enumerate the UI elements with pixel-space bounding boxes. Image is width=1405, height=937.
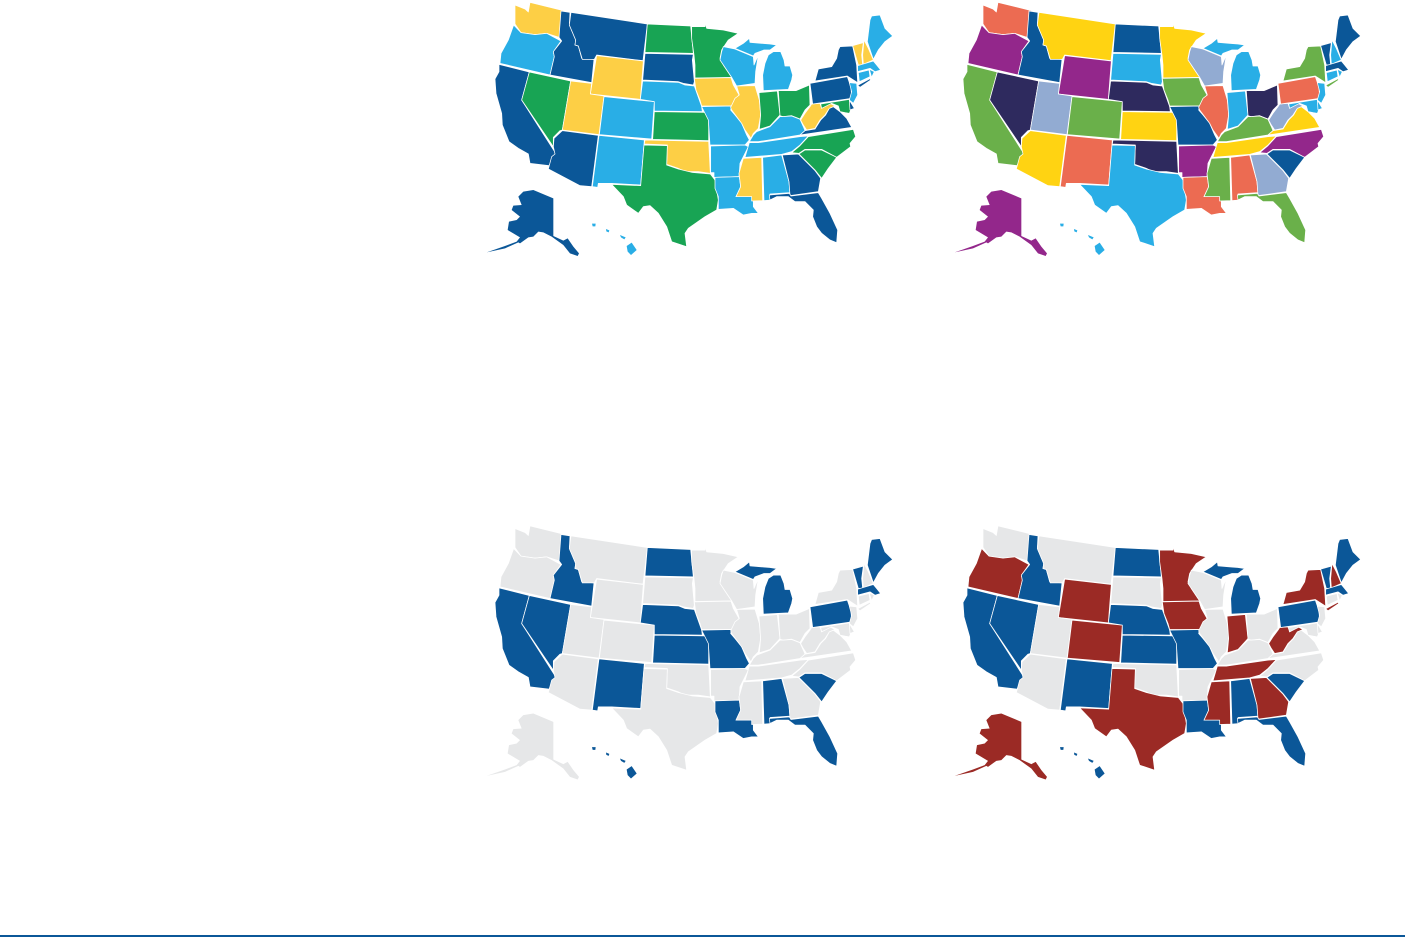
state UT (1030, 81, 1072, 135)
state LA (715, 700, 758, 738)
state ME (867, 538, 893, 583)
state MA (858, 584, 881, 595)
state KY (1217, 639, 1273, 665)
state ND (645, 24, 693, 53)
state KS (1121, 112, 1177, 141)
state CA (963, 588, 1024, 689)
state MA (858, 61, 881, 72)
state GA (1250, 677, 1289, 719)
state MS (736, 681, 763, 724)
state PA (810, 600, 852, 627)
state NE (640, 604, 702, 635)
state IL (731, 86, 761, 138)
state TN (745, 136, 808, 157)
state NH (1331, 563, 1341, 588)
state UT (1030, 604, 1072, 658)
state ID (1018, 11, 1062, 83)
state TX (1080, 145, 1186, 247)
state NJ (1317, 606, 1326, 627)
state NV (990, 595, 1039, 670)
state OK (1112, 140, 1178, 173)
state ID (550, 534, 594, 606)
state SC (1267, 673, 1305, 702)
state IL (1199, 86, 1229, 138)
state GA (782, 154, 821, 196)
state WY (1058, 56, 1111, 99)
state MT (1037, 536, 1115, 584)
bottom rule (0, 935, 1405, 937)
state MD (1289, 623, 1319, 637)
state VA (1268, 107, 1320, 135)
state RI (869, 69, 874, 77)
state TN (745, 659, 808, 681)
state MD (1289, 99, 1319, 113)
state MN (692, 23, 738, 78)
state LA (1183, 700, 1226, 738)
state VA (800, 107, 852, 135)
state AR (1179, 145, 1216, 177)
state MI (735, 562, 793, 614)
state WY (1058, 579, 1111, 623)
state MS (1204, 681, 1231, 724)
state WA (983, 2, 1033, 37)
state OH (778, 85, 810, 119)
state MT (569, 12, 647, 61)
state AR (711, 145, 748, 177)
state CA (495, 64, 556, 166)
state MT (1037, 12, 1115, 61)
state AZ (548, 131, 598, 187)
state OR (968, 25, 1029, 75)
state NM (592, 135, 644, 187)
state AZ (548, 654, 598, 710)
state UT (562, 81, 604, 135)
state OR (500, 548, 561, 598)
state KS (1121, 635, 1177, 664)
state IN (759, 91, 780, 129)
state NH (863, 40, 873, 64)
state WI (720, 47, 758, 86)
state KY (1217, 116, 1273, 142)
state AK (955, 190, 1047, 256)
state IL (731, 609, 761, 662)
state MO (1170, 106, 1217, 145)
state TN (1213, 136, 1276, 157)
state NE (1108, 604, 1170, 635)
state FL (1237, 716, 1306, 766)
state NY (1283, 46, 1339, 87)
state OH (1246, 85, 1278, 119)
state MN (1160, 23, 1206, 78)
state NM (1060, 659, 1112, 711)
state AK (955, 713, 1047, 779)
state ME (1335, 15, 1361, 59)
state TN (1213, 659, 1276, 681)
state OK (644, 140, 710, 173)
state WI (1188, 570, 1226, 609)
state NH (863, 563, 873, 588)
state IA (694, 78, 739, 106)
state SC (799, 673, 837, 702)
state VT (1321, 566, 1331, 588)
map: bottom left, blue and gray states (487, 526, 893, 779)
state NY (815, 46, 871, 87)
state MN (1160, 546, 1206, 601)
state OK (1112, 663, 1178, 697)
state NM (1060, 135, 1112, 187)
state SD (1111, 577, 1162, 608)
state KY (749, 639, 805, 665)
state NV (990, 72, 1039, 147)
state HI (1060, 224, 1105, 255)
state OK (644, 663, 710, 697)
state SC (1267, 150, 1305, 178)
state RI (1337, 69, 1342, 77)
state NC (1260, 129, 1324, 157)
state ND (1113, 547, 1161, 577)
state MD (821, 99, 851, 113)
state AL (763, 155, 790, 201)
state NV (522, 595, 571, 670)
state NJ (849, 606, 858, 627)
map: top right, multicolor states (955, 2, 1361, 256)
state KS (653, 635, 709, 664)
state AZ (1016, 131, 1066, 187)
state WA (515, 526, 565, 561)
state HI (592, 224, 637, 255)
state FL (1237, 193, 1306, 243)
state MO (702, 629, 749, 668)
state AL (1231, 155, 1258, 201)
state DE (1317, 100, 1322, 110)
state LA (1183, 177, 1226, 215)
state NJ (849, 83, 858, 103)
state VA (800, 630, 852, 658)
state MI (1203, 38, 1261, 91)
state ID (550, 11, 594, 83)
state SD (643, 53, 694, 85)
state AK (487, 713, 579, 779)
state MS (736, 157, 763, 201)
state FL (769, 716, 838, 766)
state VT (853, 43, 863, 65)
state MI (735, 38, 793, 91)
state MD (821, 623, 851, 637)
state ME (1335, 538, 1361, 583)
state SD (643, 577, 694, 608)
state MO (702, 106, 749, 145)
state NY (1283, 569, 1339, 611)
state WV (1269, 103, 1303, 130)
state CA (495, 588, 556, 689)
state PA (810, 77, 852, 104)
state AK (487, 190, 579, 256)
state OH (778, 608, 810, 642)
state MN (692, 546, 738, 601)
state KY (749, 116, 805, 142)
state IN (759, 614, 780, 653)
state CO (599, 97, 654, 139)
state TX (612, 668, 718, 770)
state NC (792, 653, 856, 681)
state PA (1278, 77, 1320, 104)
state MA (1326, 584, 1349, 595)
state MI (1203, 562, 1261, 614)
state CO (599, 620, 654, 662)
state CT (858, 70, 870, 82)
state CT (1326, 70, 1338, 82)
state CO (1067, 97, 1122, 139)
state HI (1060, 747, 1105, 778)
state NE (1108, 81, 1170, 112)
state DE (849, 100, 854, 110)
state NJ (1317, 83, 1326, 103)
state LA (715, 177, 758, 215)
state AL (1231, 678, 1258, 724)
state NC (792, 129, 856, 157)
state RI (869, 593, 874, 601)
state AR (1179, 668, 1216, 701)
state RI (1337, 593, 1342, 601)
state WY (590, 56, 643, 99)
state DE (1317, 623, 1322, 633)
state AZ (1016, 654, 1066, 710)
state TX (612, 145, 718, 247)
state MS (1204, 157, 1231, 201)
state IA (1162, 78, 1207, 106)
state FL (769, 193, 838, 243)
state ID (1018, 534, 1062, 606)
state IN (1227, 91, 1248, 129)
state ND (645, 547, 693, 577)
state NE (640, 81, 702, 112)
state SD (1111, 53, 1162, 85)
state MO (1170, 629, 1217, 668)
state UT (562, 604, 604, 658)
state AR (711, 668, 748, 701)
state WA (983, 526, 1033, 561)
state CT (858, 593, 870, 605)
state DE (849, 623, 854, 633)
state WV (801, 627, 835, 653)
state NV (522, 72, 571, 147)
state GA (782, 677, 821, 719)
state IL (1199, 609, 1229, 662)
state OH (1246, 608, 1278, 642)
state NY (815, 569, 871, 611)
state VT (1321, 43, 1331, 65)
state MA (1326, 61, 1349, 72)
state IA (1162, 601, 1207, 629)
state GA (1250, 154, 1289, 196)
state WV (1269, 627, 1303, 653)
state NM (592, 659, 644, 711)
state ME (867, 15, 893, 59)
state TX (1080, 668, 1186, 770)
state OR (500, 25, 561, 75)
state CO (1067, 620, 1122, 662)
state SC (799, 150, 837, 178)
state IA (694, 601, 739, 629)
map: bottom right, blue, red and gray states (955, 526, 1361, 779)
state AL (763, 678, 790, 724)
state WV (801, 103, 835, 130)
state IN (1227, 614, 1248, 653)
state ND (1113, 24, 1161, 53)
state OR (968, 548, 1029, 598)
state WY (590, 579, 643, 623)
state NH (1331, 40, 1341, 64)
state MT (569, 536, 647, 584)
map: top left, multicolor states (487, 2, 893, 256)
state WI (1188, 47, 1226, 86)
state WA (515, 2, 565, 37)
state KS (653, 112, 709, 141)
state VT (853, 566, 863, 588)
state VA (1268, 630, 1320, 658)
state CT (1326, 593, 1338, 605)
state WI (720, 570, 758, 609)
state NC (1260, 653, 1324, 681)
state CA (963, 64, 1024, 166)
state PA (1278, 600, 1320, 627)
state HI (592, 747, 637, 778)
